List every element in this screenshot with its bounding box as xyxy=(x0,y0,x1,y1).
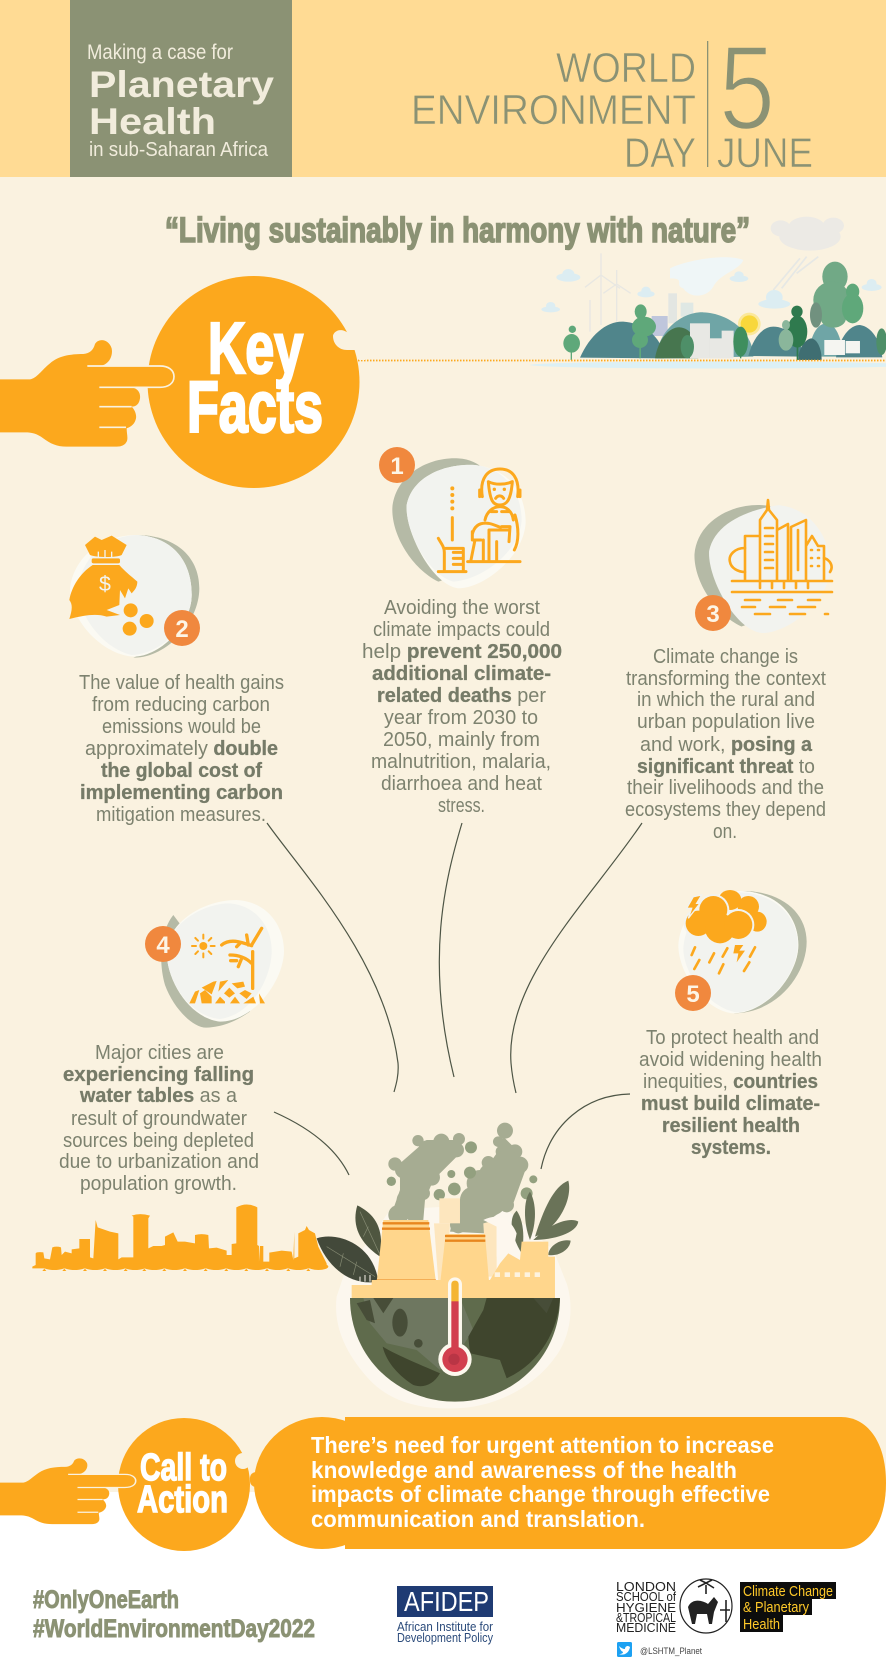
fact 3 blob xyxy=(694,505,830,633)
city skyline silhouette xyxy=(32,1204,328,1271)
hashtags xyxy=(33,1586,315,1643)
fact 1 xyxy=(362,447,562,817)
call to action panel: impacts of climate change through effective xyxy=(311,1481,770,1507)
leaves xyxy=(317,1205,381,1282)
badge 1 xyxy=(379,447,415,483)
fact 2 text: the global cost of xyxy=(101,760,262,782)
LSHTM logo: LONDON xyxy=(616,1580,676,1594)
LSHTM logo: MEDICINE xyxy=(616,1621,676,1635)
climate change and planetary health tag xyxy=(740,1582,836,1633)
world environment day heading: ENVIRONMENT xyxy=(411,86,696,133)
fact 4 text: Major cities are xyxy=(95,1042,224,1064)
call to action panel: knowledge and awareness of the health xyxy=(311,1457,737,1483)
globe hemisphere xyxy=(350,1298,560,1402)
badge 4 xyxy=(145,926,181,962)
badge 3 xyxy=(695,595,731,631)
series title box: Making a case for xyxy=(87,41,233,64)
fact 3 text: Climate change is xyxy=(653,646,798,668)
twitter handle xyxy=(617,1642,702,1657)
fact 1 text: climate impacts could xyxy=(373,619,550,641)
call to action badge: Action xyxy=(137,1479,228,1521)
climate change and planetary health tag: Climate Change xyxy=(743,1583,833,1600)
key facts badge xyxy=(148,276,365,488)
header band xyxy=(0,0,886,177)
call to action panel xyxy=(250,1417,886,1549)
fact 1 text: stress. xyxy=(438,795,485,817)
badge 4: 4 xyxy=(156,932,170,959)
factory xyxy=(352,1242,555,1298)
badge 2 xyxy=(164,610,200,646)
fact 4 xyxy=(59,900,284,1195)
fact 5 xyxy=(639,890,822,1159)
water line under landscape xyxy=(530,362,886,368)
AFIDEP logo: AFIDEP xyxy=(404,1586,489,1617)
fact 1 text: related deaths per xyxy=(377,685,546,707)
fact 1 text xyxy=(362,597,562,817)
icon: person at desk with test tube xyxy=(438,469,520,572)
fact 2 blob xyxy=(70,535,199,658)
fact 2 text: The value of health gains xyxy=(79,672,284,694)
badge 2: 2 xyxy=(175,616,189,643)
fact 1 text: additional climate- xyxy=(372,663,551,685)
fact 4 text: population growth. xyxy=(80,1173,237,1195)
fact 3 text: on. xyxy=(713,821,737,843)
series title box: in sub-Saharan Africa xyxy=(89,139,269,161)
fact 5 text: inequities, countries xyxy=(643,1071,818,1093)
fact 3 text: significant threat to xyxy=(637,756,815,778)
fact 1 text: 2050, mainly from xyxy=(383,729,540,751)
series title box: Planetary xyxy=(89,64,274,105)
series title box: Health xyxy=(89,101,216,142)
fact 4 text: sources being depleted xyxy=(63,1130,254,1152)
fact 1 text: help prevent 250,000 xyxy=(362,641,562,663)
key facts badge: Facts xyxy=(187,368,323,448)
key facts badge: Key xyxy=(208,309,303,389)
fact 2 text: emissions would be xyxy=(102,716,261,738)
fact 1 text: year from 2030 to xyxy=(384,707,538,729)
twitter handle: @LSHTM_Planet xyxy=(640,1646,702,1656)
hashtags: #WorldEnvironmentDay2022 xyxy=(33,1615,315,1643)
LSHTM logo: HYGIENE xyxy=(616,1601,676,1615)
world environment day heading xyxy=(411,44,696,176)
fact 2 xyxy=(69,535,284,826)
fact 3 text: their livelihoods and the xyxy=(627,777,824,799)
fact 5 text: To protect health and xyxy=(646,1027,819,1049)
date: 5 June: JUNE xyxy=(717,129,813,176)
fact 2 text: from reducing carbon xyxy=(92,694,270,716)
series title box xyxy=(70,0,292,177)
icon: sun, dead tree, dry rocks xyxy=(189,928,265,1003)
fact 5 text: avoid widening health xyxy=(639,1049,822,1071)
fact 3 text: urban population live xyxy=(637,711,815,733)
fact 1 text: diarrhoea and heat xyxy=(381,773,542,795)
fact 1 text: Avoiding the worst xyxy=(384,597,540,619)
AFIDEP logo xyxy=(397,1586,494,1645)
date: 5 June: 5 xyxy=(719,21,775,155)
icon: storm cloud with rain xyxy=(684,890,767,973)
call to action panel: There’s need for urgent attention to increase xyxy=(311,1432,774,1458)
fact 4 text: result of groundwater xyxy=(71,1108,247,1130)
earth and factory illustration xyxy=(317,1123,578,1408)
world environment day heading: WORLD xyxy=(556,44,696,91)
fact 2 text: implementing carbon xyxy=(80,782,283,804)
fact 2 text: approximately double xyxy=(85,738,278,760)
badge 5: 5 xyxy=(686,981,700,1008)
AFIDEP logo: African Institute for xyxy=(397,1619,494,1634)
badge 3: 3 xyxy=(706,601,720,628)
fact 1 text: malnutrition, malaria, xyxy=(371,751,551,773)
dotted connector line xyxy=(358,360,886,362)
fact 5 blob xyxy=(678,891,807,1013)
fact 4 text: experiencing falling xyxy=(63,1064,254,1086)
landscape illustration xyxy=(541,217,886,360)
fact 3 text: ecosystems they depend xyxy=(625,799,826,821)
fact 2 text: mitigation measures. xyxy=(96,804,266,826)
connector curves xyxy=(267,823,642,1175)
smoke plumes xyxy=(388,1123,528,1233)
fact 4 blob xyxy=(161,900,284,1028)
date: 5 June xyxy=(707,21,813,176)
icon: torn money bag xyxy=(69,536,154,636)
climate change and planetary health tag: Health xyxy=(743,1616,780,1633)
fact 3 text xyxy=(625,646,826,843)
crest xyxy=(680,1579,732,1633)
halo xyxy=(336,1203,571,1408)
fact 5 text: systems. xyxy=(691,1137,771,1159)
badge 1: 1 xyxy=(390,453,404,480)
fact 4 text: water tables as a xyxy=(79,1085,238,1107)
small pointing hand xyxy=(0,1458,136,1524)
cooling towers xyxy=(376,1220,489,1288)
LSHTM logo: &TROPICAL xyxy=(616,1611,676,1625)
fact 1 blob xyxy=(392,458,526,588)
icon: torn money bag: $ xyxy=(99,572,111,596)
LSHTM logo: SCHOOL of xyxy=(616,1590,676,1604)
fact 3 text: in which the rural and xyxy=(637,689,815,711)
fact 4 text xyxy=(59,1042,259,1195)
hashtags: #OnlyOneEarth xyxy=(33,1586,179,1614)
fact 2 text xyxy=(79,672,284,826)
fact 3 xyxy=(625,500,832,843)
fact 5 text xyxy=(639,1027,822,1159)
LSHTM logo xyxy=(616,1579,732,1635)
badge 5 xyxy=(675,975,711,1011)
fact 3 text: transforming the context xyxy=(626,668,826,690)
world environment day heading: DAY xyxy=(624,129,696,176)
theme quote: “Living sustainably in harmony with nature” xyxy=(165,211,750,250)
climate change and planetary health tag: & Planetary xyxy=(743,1599,809,1616)
fact 5 text: resilient health xyxy=(662,1115,800,1137)
call to action badge xyxy=(118,1418,251,1551)
pointing hand xyxy=(0,340,174,447)
back towers xyxy=(434,1198,497,1287)
icon: city skyline by water xyxy=(730,500,832,614)
call to action badge: Call to xyxy=(140,1447,227,1489)
fact 3 text: and work, posing a xyxy=(640,734,813,756)
thermometer xyxy=(438,1277,472,1376)
call to action panel: communication and translation. xyxy=(311,1506,645,1532)
AFIDEP logo: Development Policy xyxy=(397,1630,493,1645)
fact 4 text: due to urbanization and xyxy=(59,1151,259,1173)
fact 5 text: must build climate- xyxy=(641,1093,820,1115)
